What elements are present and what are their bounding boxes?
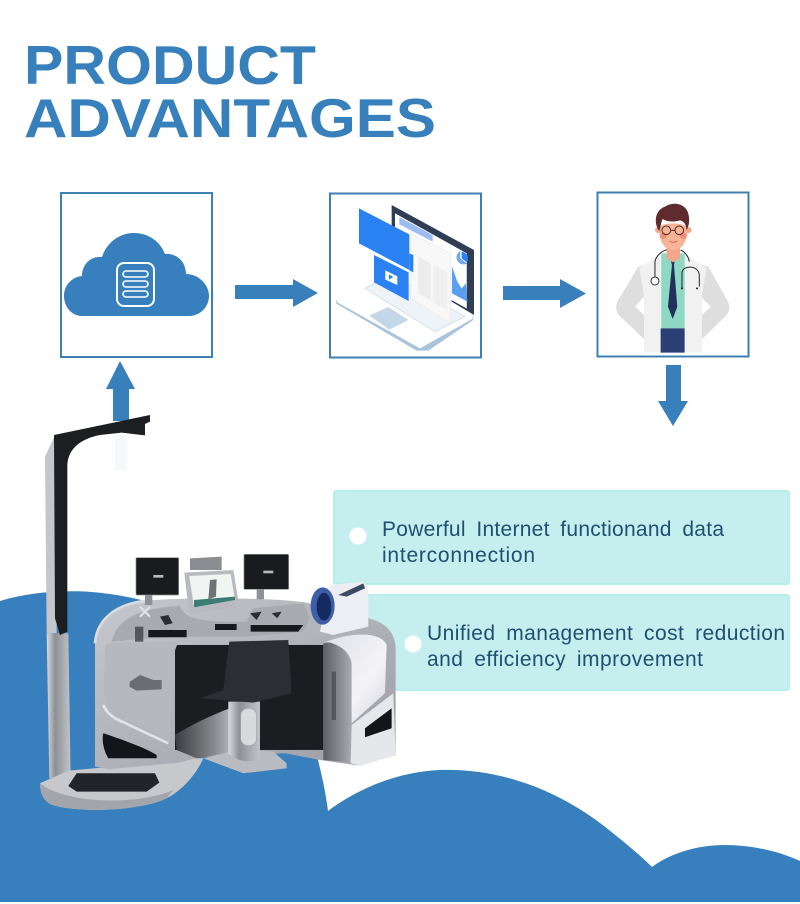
text: unified management: and efficiency improvement	[427, 648, 703, 671]
title: PRODUCT	[24, 34, 316, 96]
central touch tablet	[184, 570, 239, 615]
arrow: device up to cloud	[106, 361, 135, 421]
bullet	[404, 636, 422, 652]
blood pressure monitor	[311, 582, 368, 635]
text: unified management: Unified management cost reduction	[427, 622, 785, 645]
text: unified management	[427, 622, 785, 671]
arrow: laptop to doctor	[503, 279, 586, 308]
icon: laptop with data windows	[336, 205, 474, 351]
support stand and pedestal	[203, 702, 287, 773]
panel: advantage two	[366, 595, 789, 690]
desk top controls	[112, 603, 310, 642]
panel: doctor box	[598, 192, 748, 356]
arrow: cloud to laptop	[235, 279, 318, 307]
arrow: doctor downward	[658, 365, 688, 426]
icon: doctor	[616, 204, 729, 353]
health check station device	[40, 415, 396, 810]
scale base plate	[40, 758, 203, 810]
text: internet function: Powerful Internet functionand data	[382, 518, 724, 541]
title	[24, 34, 436, 149]
monitors	[136, 554, 289, 605]
panel: cloud storage box	[61, 193, 212, 357]
text: internet function	[382, 518, 724, 567]
icon: cloud with server	[64, 233, 209, 316]
panel: laptop box	[330, 194, 481, 358]
text: internet function: interconnection	[382, 544, 535, 567]
background blue hills	[0, 591, 800, 902]
panel: advantage one	[334, 491, 789, 584]
title: ADVANTAGES	[24, 87, 436, 149]
folding seat	[200, 640, 292, 703]
desk body	[95, 598, 396, 769]
height scale column	[45, 415, 150, 778]
bullet	[350, 528, 366, 544]
